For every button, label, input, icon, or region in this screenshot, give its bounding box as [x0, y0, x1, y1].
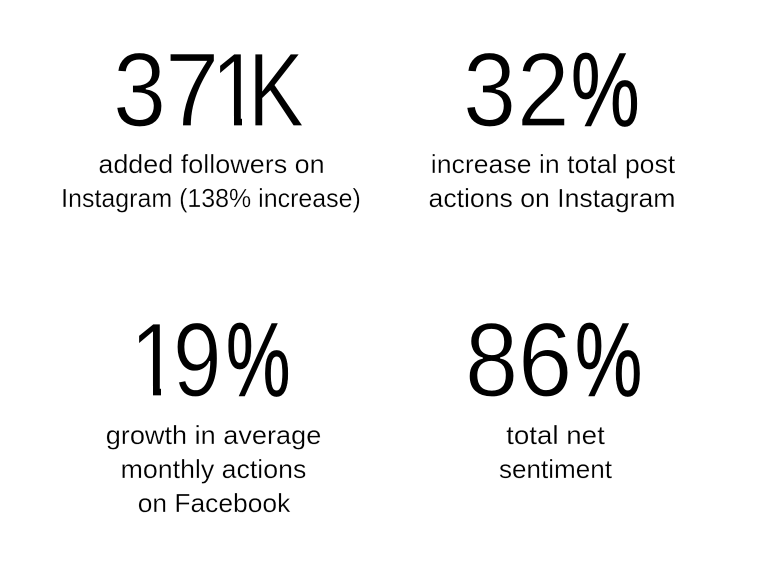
caption: added followers: [61, 149, 361, 213]
caption: post actions: [429, 149, 675, 213]
caption: net sentiment: total net: [506, 420, 605, 450]
caption: post actions: increase in total post: [431, 149, 675, 179]
caption: Facebook growth: growth in average: [106, 420, 321, 450]
stat: 32%: 3: [463, 32, 516, 149]
stat: 86%: 6: [518, 302, 572, 419]
caption: post actions: actions on Instagram: [429, 183, 675, 213]
stat: 371K: [113, 32, 304, 149]
caption: added followers: Instagram (138% increase): [61, 183, 361, 213]
caption: added followers: added followers on: [98, 149, 325, 179]
stat: 19%: %: [226, 302, 290, 419]
stat: 371K: 3: [113, 32, 166, 149]
caption: Facebook growth: on Facebook: [138, 488, 290, 518]
stat: 19%: 9: [172, 302, 221, 419]
stat: 32%: [463, 32, 640, 149]
stat: 86%: %: [575, 302, 642, 419]
stat: 32%: 2: [517, 32, 570, 149]
caption: Facebook growth: [106, 420, 321, 518]
stat: 371K: 1: [210, 32, 260, 149]
stat: 32%: %: [571, 32, 640, 149]
stat: 86%: 8: [465, 302, 518, 419]
stat: 371K: 7: [165, 32, 219, 149]
caption: net sentiment: [499, 420, 612, 484]
caption: Facebook growth: monthly actions: [121, 454, 306, 484]
stat: 86%: [465, 302, 642, 419]
stat: 19%: [130, 302, 290, 419]
stat: 371K: K: [248, 32, 304, 149]
caption: net sentiment: sentiment: [499, 454, 612, 484]
stat: 19%: 1: [130, 302, 179, 419]
